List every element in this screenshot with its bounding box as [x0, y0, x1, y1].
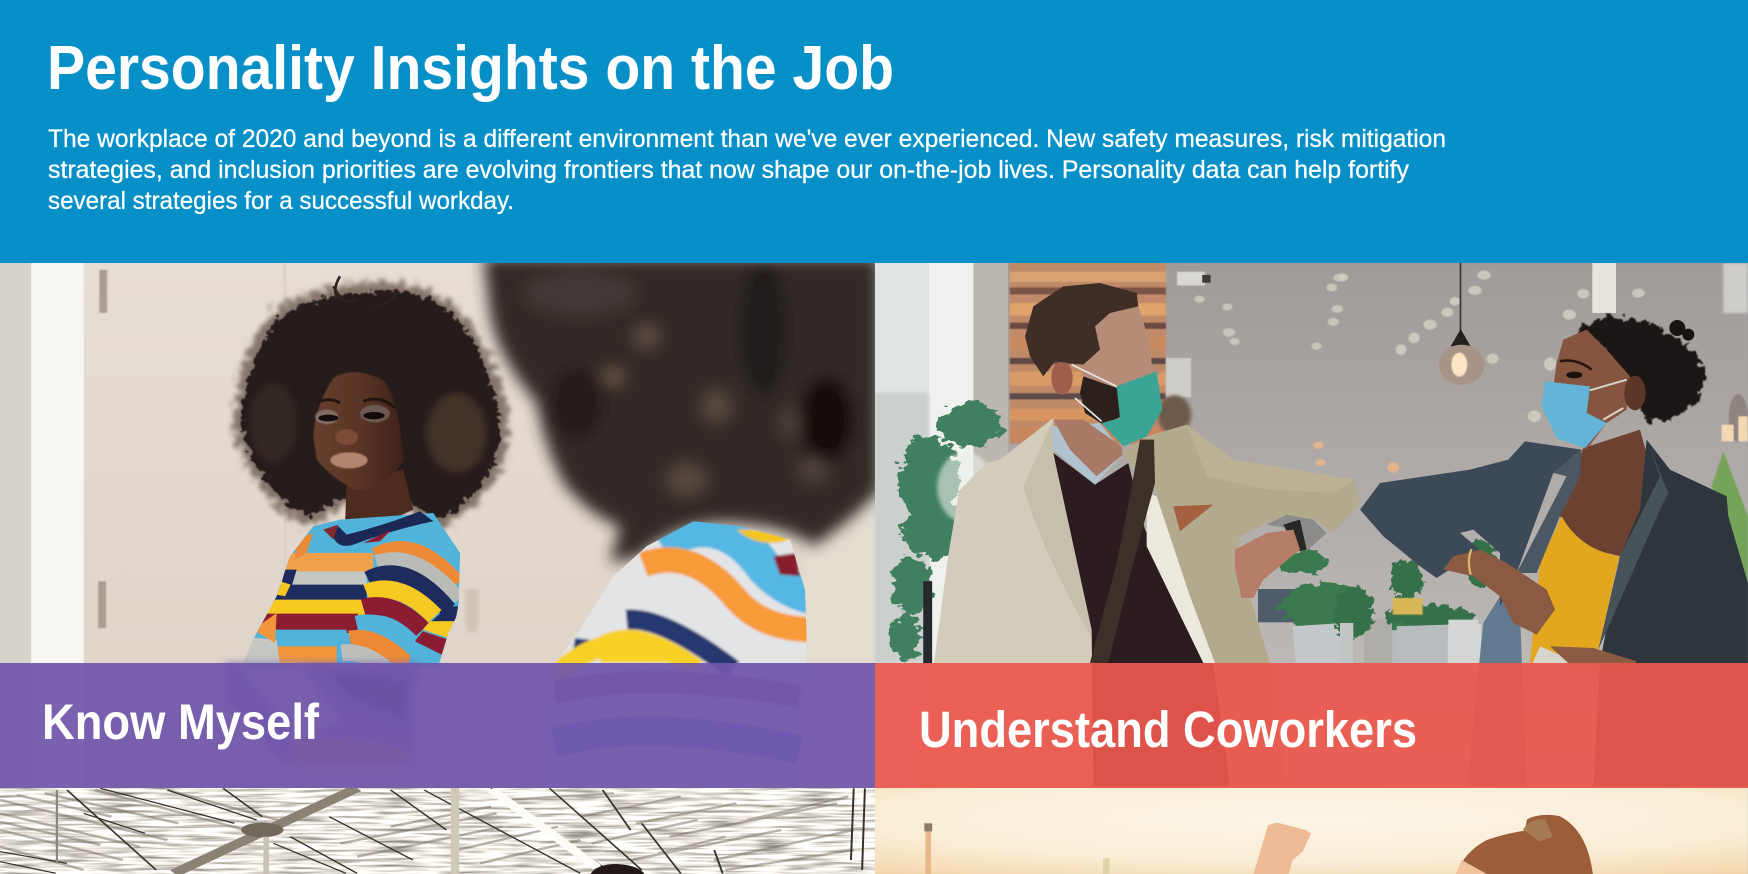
- hair: [1025, 283, 1138, 376]
- ear: [1051, 361, 1073, 395]
- man's khaki sleeve and jacket: [1122, 424, 1360, 663]
- jacket sleeve: [1360, 441, 1582, 606]
- section heading: know myself: Know Myself: [42, 694, 319, 750]
- section heading: understand coworkers: Understand Coworkers: [919, 701, 1417, 758]
- collared shirt: [1052, 423, 1123, 485]
- face: [313, 372, 403, 490]
- sweater collar: [333, 511, 433, 546]
- photo backdrop: wall and column: [0, 260, 875, 793]
- white column: [1592, 263, 1616, 313]
- woman in striped sweater: [233, 276, 509, 670]
- man's sweater: [1053, 453, 1230, 786]
- pendant lamp: [1439, 263, 1484, 385]
- title: Personality Insights on the Job: [47, 34, 894, 103]
- blurred hair: [483, 256, 880, 563]
- coral title bar: [875, 663, 1748, 788]
- phone and hand: [1533, 646, 1575, 663]
- woman's hair: [1577, 316, 1707, 423]
- face: [1075, 306, 1162, 388]
- neck: [1053, 420, 1123, 476]
- raised fist: [1254, 823, 1311, 874]
- woman with blue mask: [1333, 263, 1748, 786]
- panel: understand coworkers: [873, 260, 1748, 793]
- hand: [1235, 530, 1300, 598]
- beard: [1080, 376, 1122, 425]
- sweater: [237, 510, 467, 670]
- small plants: [1333, 540, 1497, 640]
- pocket square: [1173, 505, 1213, 531]
- intro paragraph: [48, 125, 1446, 215]
- jacket lining: [1147, 493, 1215, 663]
- jacket lower panel: [1467, 596, 1527, 786]
- green plant right: [1712, 451, 1748, 583]
- purple title bar: [0, 663, 875, 788]
- panel: know myself: [0, 256, 880, 793]
- man with teal mask: [923, 283, 1360, 786]
- ponytail hair: [1456, 815, 1593, 874]
- neck: [345, 470, 414, 520]
- photo backdrop: office wall, bricks, plants: [873, 260, 1748, 793]
- intro paragraph: strategies, and inclusion priorities are evolving frontiers that now shape our on-the-job lives. Personality data can help fortify: [48, 156, 1409, 184]
- teal mask: [1102, 371, 1162, 446]
- sweater ghost under bar: [225, 663, 420, 765]
- face: [1553, 330, 1630, 450]
- watch: [1267, 515, 1327, 551]
- header band: [0, 0, 1748, 263]
- shoulder strap: [1090, 440, 1155, 663]
- photo: greenhouse roof: [0, 788, 875, 874]
- forearm and hand: [1443, 550, 1555, 635]
- yellow top: [1530, 516, 1619, 663]
- photo: cheering woman: [873, 788, 1748, 874]
- man's light jacket: [934, 418, 1092, 663]
- bokeh lights: [1339, 270, 1645, 422]
- second lamp: [1722, 394, 1748, 442]
- blurred foreground figure: [483, 256, 880, 786]
- afro hair: [233, 276, 509, 528]
- blurred sweater: [552, 521, 807, 762]
- intro paragraph: several strategies for a successful workday.: [48, 187, 514, 215]
- jacket right: [1593, 440, 1748, 786]
- chest and neck: [1560, 430, 1660, 556]
- intro paragraph: The workplace of 2020 and beyond is a different environment than we've ever experienced. New safety measures, risk mitigation: [48, 125, 1446, 153]
- blue mask: [1542, 381, 1607, 448]
